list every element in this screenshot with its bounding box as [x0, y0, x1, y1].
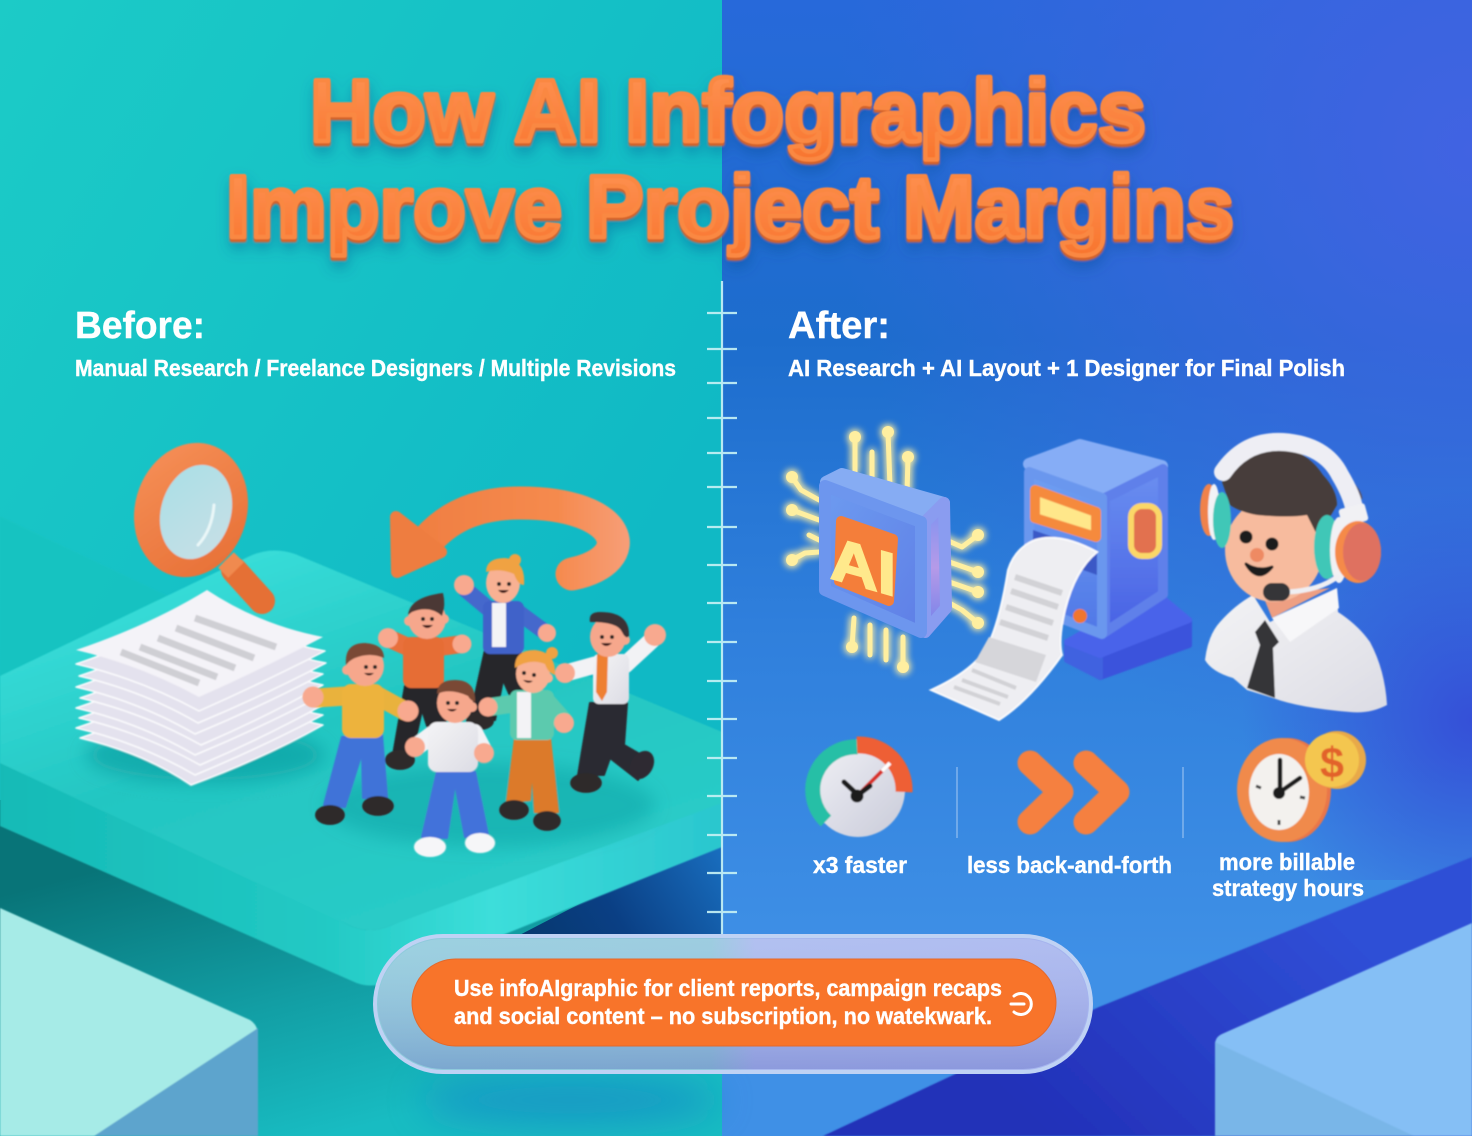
- orange pill: [412, 959, 1056, 1046]
- icon: printer with paper: [931, 445, 1189, 720]
- icon: clock with dollar coin: [1237, 731, 1366, 842]
- chip circuit traces: [786, 426, 984, 673]
- background: pale cube lower left: [0, 908, 258, 1136]
- background: shadow under platform: [0, 800, 722, 1136]
- title: [226, 61, 1234, 256]
- designer face: [1225, 498, 1323, 602]
- background: indigo diagonal band lower right: [823, 857, 1472, 1136]
- icon: magnifying glass: [118, 429, 264, 601]
- icon: AI chip: [786, 426, 984, 673]
- background: blue right half: [722, 0, 1472, 1136]
- background: platform: [0, 550, 722, 986]
- label: x3 faster: x3 faster: [813, 852, 907, 878]
- printer slot: [1033, 530, 1097, 575]
- platform top surface: [0, 550, 722, 930]
- heading: before: Before:: [75, 305, 205, 347]
- headset: [1200, 442, 1381, 601]
- icon: exit arrow: [1011, 994, 1031, 1014]
- AI label: AI: [830, 524, 896, 609]
- subheading: before: Manual Research / Freelance Designers / Multiple Revisions: [75, 355, 676, 381]
- icon: revision loop arrow: [396, 503, 613, 574]
- label: more billable strategy hours: strategy hours: [1212, 875, 1364, 901]
- icon: speed gauge: [811, 743, 905, 837]
- people group: freelance designers: [302, 554, 666, 857]
- icon: paper stack: [76, 590, 326, 785]
- designer tie: [1247, 620, 1279, 698]
- call to action: [375, 936, 1091, 1072]
- dollar sign: $: [1320, 739, 1344, 788]
- printer screen: [1035, 490, 1096, 537]
- separators between benefits: [957, 767, 1183, 838]
- printer base: [1067, 600, 1189, 677]
- call to action text: and social content – no subscription, no watekwark.: [454, 1003, 992, 1029]
- platform front lip: [0, 755, 722, 986]
- top sheet: [76, 590, 323, 697]
- headset back: [1333, 462, 1362, 500]
- label: less back-and-forth: less back-and-forth: [967, 852, 1172, 878]
- designer neck: [1263, 588, 1330, 618]
- subheading: after: AI Research + AI Layout + 1 Designer for Final Polish: [788, 355, 1345, 381]
- icon: double chevrons: [1030, 763, 1117, 822]
- AI tile: [839, 521, 893, 601]
- person: orange sweater: [378, 593, 472, 770]
- background: teal left half: [0, 0, 722, 1136]
- glass pill: [375, 936, 1091, 1072]
- person: white tee front: [405, 680, 495, 857]
- call to action text: [454, 975, 1002, 1029]
- label: more billable strategy hours: more billable: [1219, 849, 1355, 875]
- icon: designer with headset: [1200, 442, 1387, 712]
- person: white shirt and tie: [555, 612, 666, 793]
- title: Improve Project Margins: [226, 157, 1234, 256]
- heading: after: After:: [788, 305, 890, 347]
- background: navy recess behind platform: [510, 830, 722, 940]
- background: pale blue cube lower right: [1215, 923, 1472, 1136]
- vertical divider ruler: [707, 281, 737, 935]
- designer collar: [1272, 588, 1339, 642]
- background: diagonal band upper left: [0, 516, 260, 760]
- label: more billable strategy hours: [1212, 849, 1364, 901]
- designer hair: [1222, 448, 1337, 537]
- person: blue jacket: [454, 554, 556, 730]
- background: blue glow below call-to-action: [420, 1074, 720, 1126]
- printed paper: [931, 538, 1097, 720]
- person: yellow sweater: [302, 643, 418, 825]
- person: green jacket: [478, 647, 574, 831]
- call to action text: Use infoAIgraphic for client reports, campaign recaps: [454, 975, 1002, 1001]
- printer knob: [1131, 506, 1159, 556]
- designer shirt: [1205, 588, 1387, 712]
- title: How AI Infographics: [310, 61, 1146, 160]
